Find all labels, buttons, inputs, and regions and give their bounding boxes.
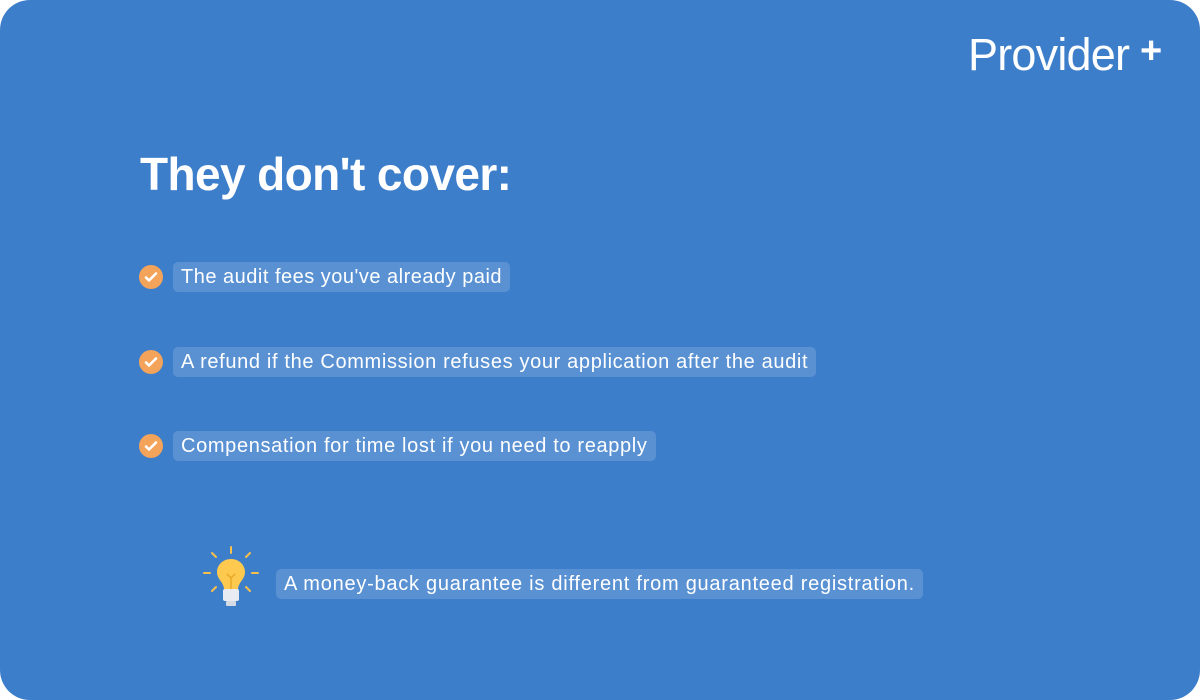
text: Compensation for time lost if you need to reapply <box>181 435 648 457</box>
list item 3 <box>139 431 656 461</box>
tip text: A money-back guarantee is different from guaranteed registration. <box>284 573 915 595</box>
logo: Provider <box>968 29 1129 80</box>
text: A refund if the Commission refuses your application after the audit <box>181 351 808 373</box>
icon: check <box>139 434 163 458</box>
text: The audit fees you've already paid <box>181 266 502 288</box>
list item 2 <box>139 347 816 377</box>
list item 1 <box>139 262 510 292</box>
icon: check <box>139 265 163 289</box>
title: They don't cover: <box>140 148 511 200</box>
text <box>173 262 510 292</box>
icon: lightbulb <box>203 546 259 606</box>
icon: check <box>139 350 163 374</box>
logo plus: + <box>1140 30 1162 72</box>
callout tip <box>203 546 923 606</box>
